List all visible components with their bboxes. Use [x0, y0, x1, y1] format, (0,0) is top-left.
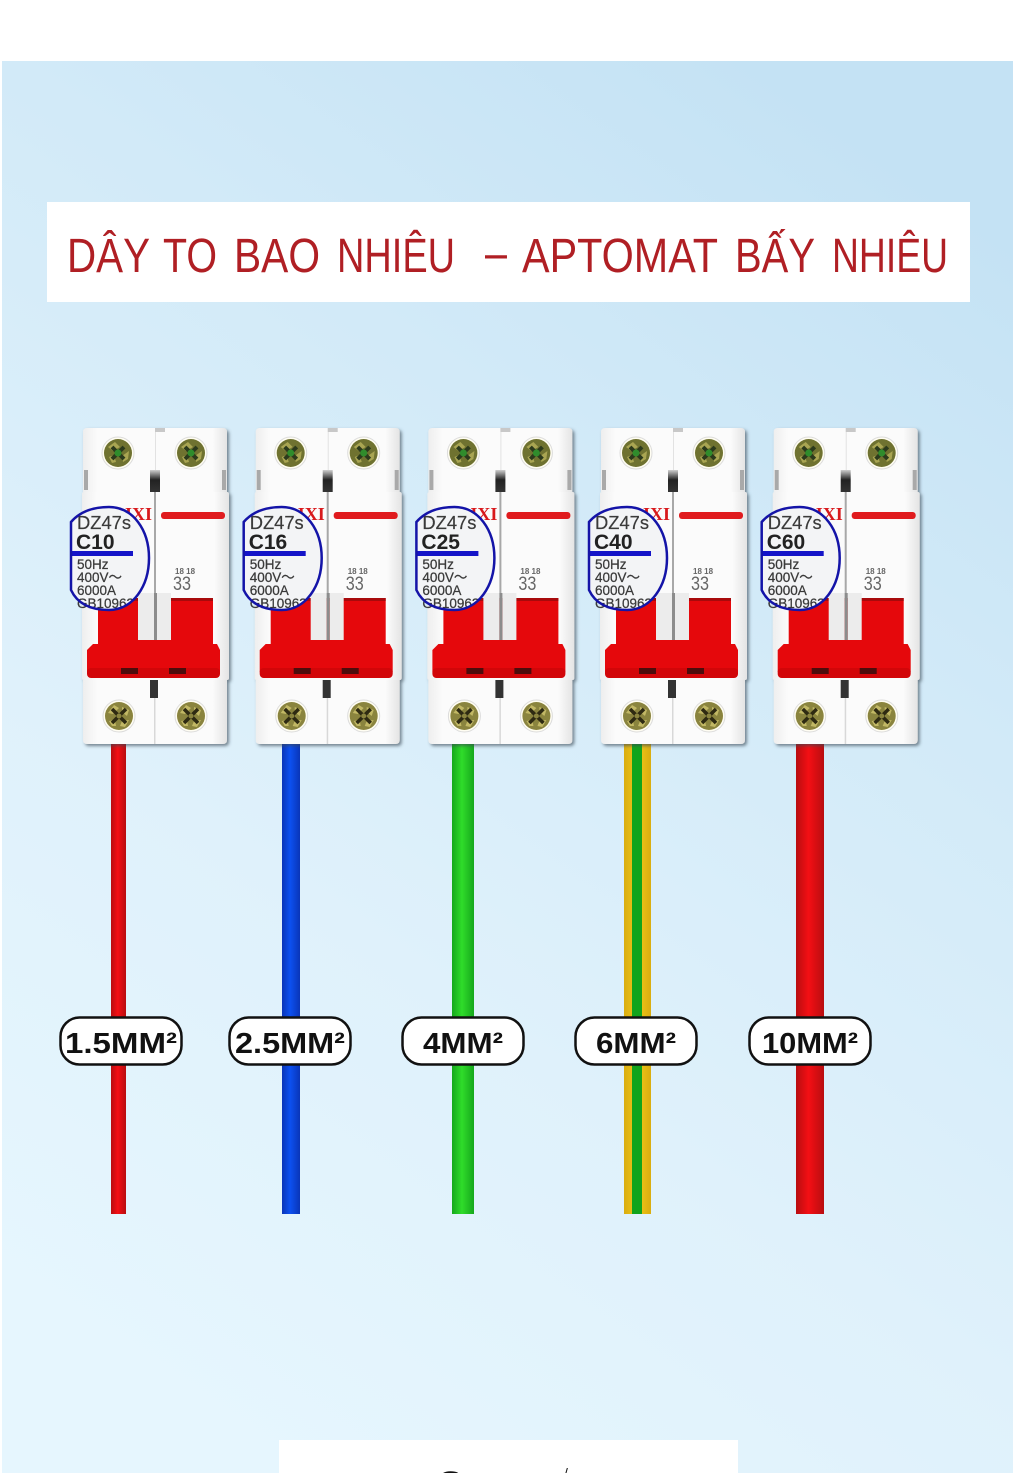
rating label [589, 507, 667, 611]
size label: 6mm²: 6MM² [596, 1028, 676, 1060]
rating label: GB10963 [77, 596, 134, 611]
cropped caption text [437, 1464, 568, 1473]
terminal number: 33 [864, 574, 882, 595]
rating label: 6000A [595, 583, 634, 598]
wire: 2.5mm blue [282, 742, 300, 1214]
title text: NHIÊU [337, 230, 455, 283]
terminal number: 18 18 [520, 567, 541, 576]
title text [67, 227, 948, 283]
brand mark: IXI [298, 504, 325, 524]
rating label: 400V～ [77, 570, 122, 585]
brand mark: IXI [470, 504, 497, 524]
breaker C40 [589, 428, 747, 744]
rating label [244, 507, 322, 611]
rating label: C16 [249, 531, 287, 554]
terminal number: 33 [691, 574, 709, 595]
rating label [71, 507, 149, 611]
title banner [47, 202, 970, 302]
size label: 6mm² [576, 1018, 696, 1064]
rating label: 400V～ [768, 570, 813, 585]
rating label: 50Hz [77, 557, 109, 572]
rating label: 6000A [768, 583, 807, 598]
rating label: GB10963 [768, 596, 825, 611]
wire: 4mm green [452, 742, 474, 1214]
breaker C16 [244, 428, 402, 744]
size label: 4mm² [402, 1018, 524, 1064]
rating label: C60 [767, 531, 805, 554]
size label: 10mm² [750, 1018, 870, 1064]
brand mark: IXI [816, 504, 843, 524]
rating label: GB10963 [595, 596, 652, 611]
rating label: 50Hz [422, 557, 454, 572]
title text: BAO [234, 230, 320, 283]
bottom white panel with cropped caption [279, 1440, 738, 1473]
size label: 1.5mm²: 1.5MM² [65, 1028, 177, 1060]
size label: 2.5mm² [230, 1018, 350, 1064]
brand mark: IXI [125, 504, 152, 524]
rating label: DZ47s [77, 513, 131, 533]
size label: 4mm²: 4MM² [423, 1028, 503, 1060]
title text: DÂY [67, 230, 150, 283]
terminal number: 18 18 [175, 567, 196, 576]
size label: 2.5mm²: 2.5MM² [235, 1028, 345, 1060]
size label: 10mm²: 10MM² [762, 1028, 858, 1060]
rating label: 400V～ [595, 570, 640, 585]
rating label: DZ47s [768, 513, 822, 533]
rating label [416, 507, 494, 611]
title text: – [485, 227, 507, 280]
terminal number: 18 18 [693, 567, 714, 576]
rating label: 6000A [77, 583, 116, 598]
title text: NHIÊU [832, 230, 948, 283]
rating label: 50Hz [250, 557, 281, 572]
terminal number: 18 18 [348, 567, 368, 576]
terminal number: 33 [173, 574, 191, 595]
rating label: DZ47s [250, 513, 304, 533]
wire: 10mm red [796, 742, 824, 1214]
title text: BẤY [735, 229, 815, 283]
rating label: GB10963 [250, 596, 307, 611]
brand mark: IXI [643, 504, 670, 524]
rating label: C40 [594, 531, 633, 554]
rating label: 400V～ [250, 570, 295, 585]
rating label: 400V～ [422, 570, 467, 585]
title text: TO [163, 230, 217, 283]
rating label: C25 [421, 531, 460, 554]
rating label [762, 507, 840, 611]
rating label: GB10963 [422, 596, 479, 611]
breaker C60 [762, 428, 920, 744]
rating label: 6000A [250, 583, 289, 598]
wire: 1.5mm red [111, 742, 126, 1214]
rating label: DZ47s [422, 513, 476, 533]
terminal number: 18 18 [866, 567, 886, 576]
breaker C10 [71, 428, 229, 744]
rating label: 50Hz [768, 557, 799, 572]
rating label: DZ47s [595, 513, 649, 533]
terminal number: 33 [346, 574, 364, 595]
title text: APTOMAT [522, 230, 718, 283]
rating label: C10 [76, 531, 115, 554]
rating label: 6000A [422, 583, 461, 598]
terminal number: 33 [518, 574, 536, 595]
rating label: 50Hz [595, 557, 627, 572]
size label: 1.5mm² [60, 1018, 182, 1064]
wire: 6mm yellow-green [624, 742, 651, 1214]
breaker C25 [416, 428, 574, 744]
